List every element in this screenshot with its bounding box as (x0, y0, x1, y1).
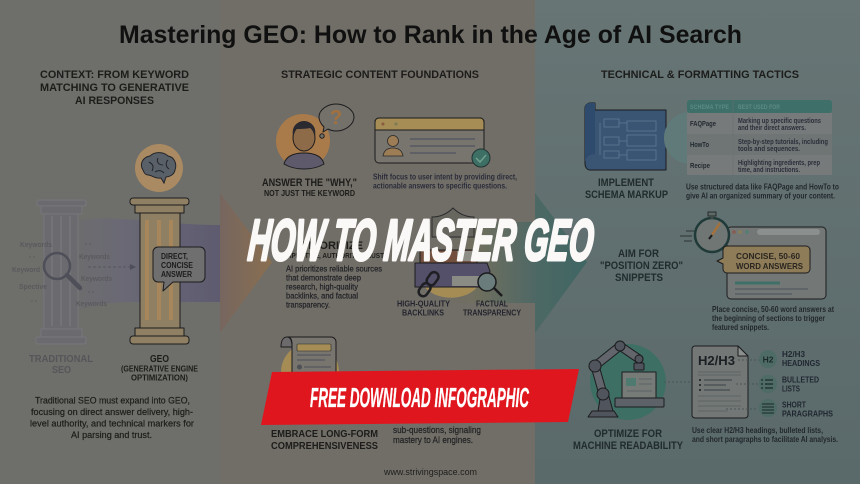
text: context summary: Traditional SEO must expand into GEO, (35, 396, 190, 406)
label: GEO (121, 354, 199, 382)
callout: direct answer: ANSWER (161, 270, 192, 279)
label: traditional SEO (29, 354, 93, 376)
label: factual transparency: TRANSPARENCY (463, 308, 522, 318)
text: machine readability: Use clear H2/H3 headings, bulleted lists, (692, 425, 823, 435)
text: snippets: Place concise, 50-60 word answers at (712, 304, 834, 314)
label: long-form (271, 428, 378, 452)
icon: short paragraphs (759, 399, 777, 417)
label: position zero: SNIPPETS (615, 272, 663, 284)
heading: context: CONTEXT: FROM KEYWORD (40, 69, 189, 81)
icon: H2/H3 document (664, 346, 760, 418)
icon: robot arm (588, 341, 666, 420)
arrow: context to strategy (40, 193, 272, 333)
label: schema markup (585, 177, 668, 201)
label: prioritize EEAT: PRIORITIZE (301, 240, 363, 252)
label: traditional SEO: TRADITIONAL (29, 354, 93, 365)
callout: direct answer: DIRECT, (161, 252, 188, 261)
table: schema types: and their direct answers. (738, 125, 806, 132)
table: schema types: FAQPage (690, 119, 716, 128)
label: answer the why: NOT JUST THE KEYWORD (264, 188, 355, 198)
arrow: strategy to tactics (430, 193, 587, 333)
text: user intent: Shift focus to user intent by providing direct, (373, 172, 517, 182)
icon: person with question (276, 104, 354, 169)
table: schema types: tools and sequences. (738, 146, 800, 153)
table: schema types: HowTo (690, 140, 709, 149)
text: snippets: the beginning of sections to trigger (712, 313, 826, 323)
label: bulleted lists: LISTS (782, 384, 800, 394)
label: factual transparency: FACTUAL (476, 300, 508, 308)
label: long-form: COMPREHENSIVENESS (271, 440, 378, 452)
table: schema types: SCHEMA TYPE (690, 105, 729, 111)
label: bulleted lists (782, 374, 819, 394)
icon: browser window (727, 227, 826, 299)
label: short paragraphs: SHORT (782, 400, 807, 410)
table: schema types: Marking up specific questions (738, 118, 821, 125)
callout: direct answer: CONCISE (161, 261, 194, 270)
icon: brain (135, 144, 183, 192)
callout: concise answers (717, 246, 810, 273)
label: schema markup: SCHEMA MARKUP (585, 189, 668, 201)
table: schema types: time, and instructions. (738, 167, 800, 174)
label: bulleted lists: BULLETED (782, 374, 819, 384)
title: Mastering GEO: How to Rank in the Age of AI Search (119, 21, 742, 49)
text: context summary: AI parsing and trust. (71, 430, 152, 441)
label: short paragraphs (782, 400, 833, 418)
label: prioritize EEAT: EXPERTISE, AUTHORITY, TRUST (283, 251, 384, 260)
red download banner: FREE DOWNLOAD INFOGRAPHIC (310, 382, 530, 413)
keyword cloud: Keywords (81, 274, 112, 283)
label: headings: HEADINGS (782, 358, 820, 368)
pillar: traditional SEO (36, 200, 86, 344)
text: context summary: level authority, and technical markers for (30, 418, 194, 430)
red download banner (261, 369, 579, 425)
keyword cloud: Keywords (79, 252, 110, 261)
table: schema types: Recipe (690, 161, 710, 170)
text: snippets: featured snippets. (712, 322, 769, 332)
heading: context: MATCHING TO GENERATIVE (40, 82, 189, 94)
label: headings: H2/H3 (782, 349, 805, 359)
label: answer the why (262, 177, 357, 198)
keyword cloud: Keywords (20, 240, 52, 249)
callout: concise answers: CONCISE, 50-60 (736, 251, 800, 261)
callout: direct answer (153, 247, 205, 291)
text: reliable sources: backlinks, and factual (286, 290, 358, 300)
icon: long document scroll (281, 337, 339, 401)
label: high-quality backlinks (397, 300, 451, 318)
text: sub-questions: mastery to AI engines. (393, 435, 473, 445)
text: sub-questions: sub-questions, signaling (393, 425, 481, 435)
heading: context (40, 69, 189, 107)
icon: browser with check (375, 118, 490, 167)
label: GEO: GEO (150, 354, 169, 365)
label: headings (782, 349, 820, 368)
heading: context: AI RESPONSES (75, 95, 154, 107)
icon: headings (759, 350, 777, 368)
text: user intent: actionable answers to specific questions. (373, 180, 507, 190)
icon: person with question: ? (330, 107, 342, 129)
text: reliable sources (286, 264, 382, 310)
table: schema types (664, 100, 832, 175)
label: long-form: EMBRACE LONG-FORM (271, 428, 378, 440)
label: answer the why: ANSWER THE "WHY," (262, 177, 357, 189)
text: context summary (30, 396, 194, 441)
text: reliable sources: that demonstrate deep (286, 272, 361, 282)
text: structured data (686, 182, 839, 200)
text: snippets (712, 304, 834, 332)
keyword cloud (12, 240, 112, 308)
icon: stopwatch (680, 212, 729, 252)
label: machine readability (573, 428, 684, 452)
label: high-quality backlinks: BACKLINKS (402, 308, 445, 318)
dashed arrow (88, 264, 136, 270)
icon: headings: H2 (763, 354, 774, 364)
label: short paragraphs: PARAGRAPHS (782, 408, 833, 418)
icon: magnifier (44, 253, 80, 288)
callout: concise answers: WORD ANSWERS (736, 261, 803, 271)
label: machine readability: OPTIMIZE FOR (594, 428, 662, 440)
text: reliable sources: transparency. (286, 300, 330, 310)
panel: context (12, 69, 205, 441)
panel: strategic content foundations (262, 69, 522, 452)
table: schema types: BEST USED FOR (738, 105, 781, 111)
panel: technical and formatting tactics (573, 69, 839, 452)
label: prioritize EEAT (283, 240, 384, 260)
heading: strategy: STRATEGIC CONTENT FOUNDATIONS (281, 69, 479, 81)
label: factual transparency (463, 300, 522, 318)
label: GEO: OPTIMIZATION) (131, 374, 188, 382)
label: machine readability: MACHINE READABILITY (573, 440, 684, 452)
label: high-quality backlinks: HIGH-QUALITY (397, 300, 451, 308)
label: position zero: "POSITION ZERO" (600, 260, 683, 272)
label: position zero: AIM FOR (618, 248, 659, 260)
table: schema types: Step-by-step tutorials, including (738, 139, 828, 146)
label: schema markup: IMPLEMENT (598, 177, 654, 189)
table: schema types: Highlighting ingredients, prep (738, 160, 820, 167)
heading: tactics: TECHNICAL & FORMATTING TACTICS (601, 69, 799, 81)
text: machine readability (692, 425, 838, 444)
label: traditional SEO: SEO (52, 365, 71, 376)
website credit: www.strivingspace.com (383, 467, 477, 477)
icon: bulleted lists (759, 375, 777, 393)
keyword cloud: Keywords (76, 299, 107, 308)
text: reliable sources: research, high-quality (286, 282, 359, 292)
icon: H2/H3 document: H2/H3 (698, 353, 735, 368)
label: GEO: (GENERATIVE ENGINE (121, 364, 199, 374)
keyword cloud: Spective (19, 282, 47, 291)
label: position zero (600, 248, 683, 284)
text: reliable sources: AI prioritizes reliable sources (286, 264, 382, 274)
icon: shield, books, chain and magnifier (415, 208, 502, 298)
text: context summary: focusing on direct answer delivery, high- (31, 407, 193, 418)
icon: blueprint (585, 103, 666, 170)
text: sub-questions (393, 425, 481, 445)
keyword cloud: Keyword (12, 265, 40, 274)
text: user intent (373, 172, 517, 190)
pillar: GEO (130, 198, 189, 344)
